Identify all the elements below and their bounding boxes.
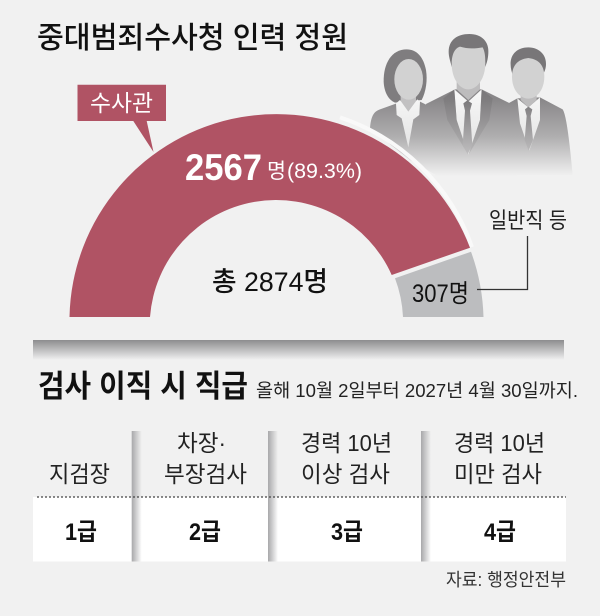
callout: 수사관 label	[78, 85, 166, 152]
column 2	[164, 430, 247, 546]
column separators	[132, 431, 431, 562]
column 1: 지검장	[49, 461, 110, 487]
column 3: 3급	[331, 519, 363, 546]
value: 307명: 307명	[412, 280, 469, 308]
label: 일반직 등: 일반직 등	[489, 208, 567, 233]
column 3: 이상 검사	[301, 461, 390, 487]
icon: right man	[500, 47, 573, 175]
column 2: 차장·	[177, 430, 226, 456]
subheading: period: 올해 10월 2일부터 2027년 4월 30일까지.	[256, 380, 578, 401]
chart: semicircle gauge	[70, 114, 484, 317]
value: 수사관 인원: 명	[267, 160, 286, 183]
title: 중대범죄수사청 인력 정원	[37, 22, 348, 55]
column 4: 4급	[484, 519, 516, 546]
section divider bar	[33, 340, 564, 360]
dotted rule	[37, 496, 566, 498]
value: 수사관 인원: 2567	[185, 147, 262, 188]
column 4: 미만 검사	[454, 461, 542, 487]
grade row background	[33, 497, 566, 562]
callout: 수사관 label: 수사관	[90, 90, 153, 116]
column 4: 경력 10년	[454, 430, 545, 456]
column 2: 부장검사	[164, 461, 247, 487]
leader line	[477, 236, 528, 290]
icon: centre man	[426, 34, 517, 176]
arc halo	[340, 117, 472, 247]
column 3: 경력 10년	[301, 430, 392, 456]
arc: 수사관 segment	[70, 114, 470, 317]
column 3	[301, 430, 392, 546]
value: 수사관 인원	[185, 147, 362, 188]
source: 자료: 행정안전부	[446, 570, 566, 590]
value: 수사관 인원: (89.3%)	[287, 160, 362, 183]
column 1: 1급	[65, 519, 97, 546]
column 4	[454, 430, 545, 546]
table: grades	[33, 430, 566, 562]
column 1	[49, 461, 110, 546]
heading: 검사 이직 시 직급: 검사 이직 시 직급	[38, 369, 248, 404]
icon: woman	[370, 49, 436, 175]
column 2: 2급	[189, 519, 221, 546]
icon: three office workers	[370, 34, 573, 176]
value: total: 총 2874명	[212, 267, 328, 297]
arc: 일반직 segment	[395, 252, 484, 317]
